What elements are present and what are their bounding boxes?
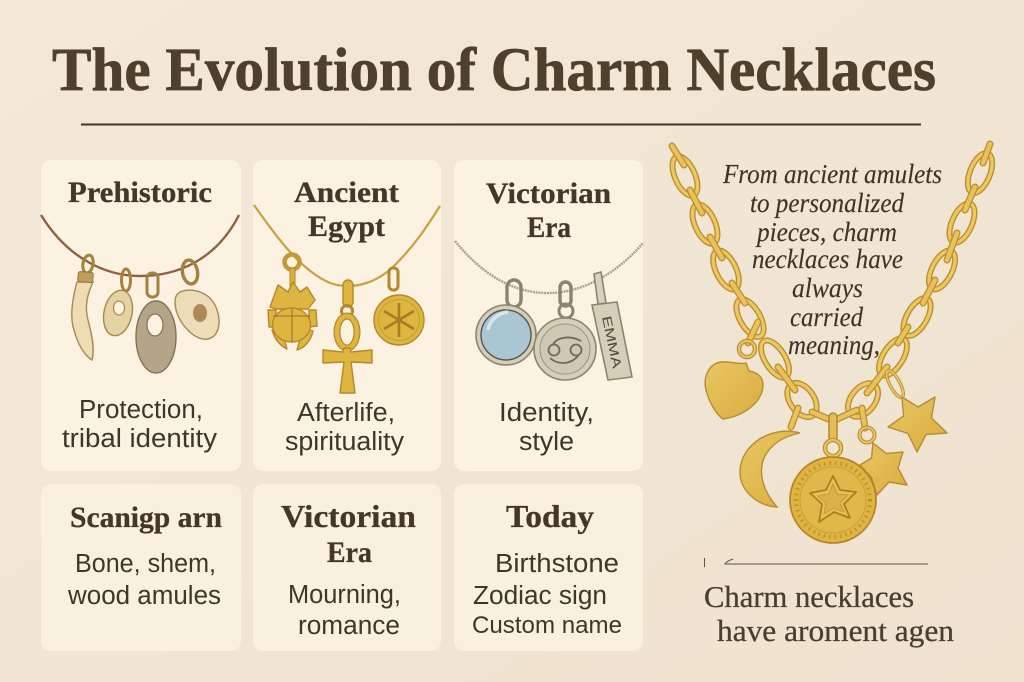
heading: victorian era: Victorian [281,498,416,534]
charm: name tag [592,272,632,380]
heading: victorian era [281,498,416,569]
quote text: to personalized [750,188,904,218]
charm: bone disc [100,269,136,338]
text: mourning: Mourning, [288,581,401,609]
title: The Evolution of Charm Necklaces [52,37,936,104]
quote text: From ancient amulets [722,159,942,189]
caption: have aroment agen [717,613,955,648]
charm: heart [705,322,763,419]
charm: ankh [323,280,372,393]
charm: tooth [72,254,94,360]
panel: scandinavian [41,484,241,651]
panel: victorian era mourning [253,484,441,651]
text: mourning [288,581,401,640]
charm: crescent moon [740,408,800,507]
cord [41,215,239,276]
heading: victorian era [486,177,611,244]
caption: Charm necklaces [704,579,914,614]
heading: victorian era: Era [527,211,571,244]
text: egypt meaning: Afterlife, [297,399,395,427]
text: egypt meaning [285,399,404,456]
caption [704,579,955,648]
text: personalization options: Custom name [472,612,622,639]
panel: ancient egypt [253,160,441,471]
quote text [722,159,942,360]
gold chain necklace [667,144,997,422]
charm: star coin [790,413,876,543]
charm: stone [136,273,176,373]
chain [455,241,643,293]
chain [254,205,440,286]
text: prehistoric meaning [62,396,217,453]
panel: prehistoric [41,160,241,471]
quote text: pieces, charm [755,217,897,247]
heading: scanigp arn: Scanigp arn [70,501,222,534]
heading: today: Today [506,498,594,534]
charm: sun disc [374,268,424,345]
text: identity meaning: style [519,428,574,456]
charm: scarab [268,254,317,350]
charm: shell [175,259,219,339]
charm: star right [884,368,947,452]
text: egypt meaning: spirituality [285,428,404,456]
text: mourning: romance [298,612,400,640]
heading: victorian era: Victorian [486,177,611,210]
quote text: necklaces have [752,244,903,274]
text: personalization options: Birthstone [495,550,619,578]
panel: today [454,484,643,651]
heading: ancient egypt [294,176,399,243]
text: personalization options: Zodiac sign [473,582,607,610]
charm: zodiac coin [534,282,596,380]
quote text: always [792,273,863,303]
text: materials [67,550,221,610]
text: prehistoric meaning: tribal identity [62,425,217,453]
quote text: carried [790,302,863,332]
charm: name tag: EMMA [599,315,625,370]
heading: ancient egypt: Ancient [294,176,399,209]
heading: prehistoric: Prehistoric [68,176,212,209]
heading: victorian era: Era [327,536,372,569]
charm: blue stone [476,280,536,365]
heading: ancient egypt: Egypt [308,210,385,243]
text: personalization options [472,550,622,639]
panel: victorian era identity [454,160,643,471]
text: materials: wood amules [67,582,221,610]
text: materials: Bone, shem, [75,550,216,578]
text: identity meaning [499,399,594,456]
text: identity meaning: Identity, [499,399,594,427]
text: prehistoric meaning: Protection, [79,396,203,424]
quote text: meaning, [788,330,880,360]
charm: star behind coin [860,408,907,495]
